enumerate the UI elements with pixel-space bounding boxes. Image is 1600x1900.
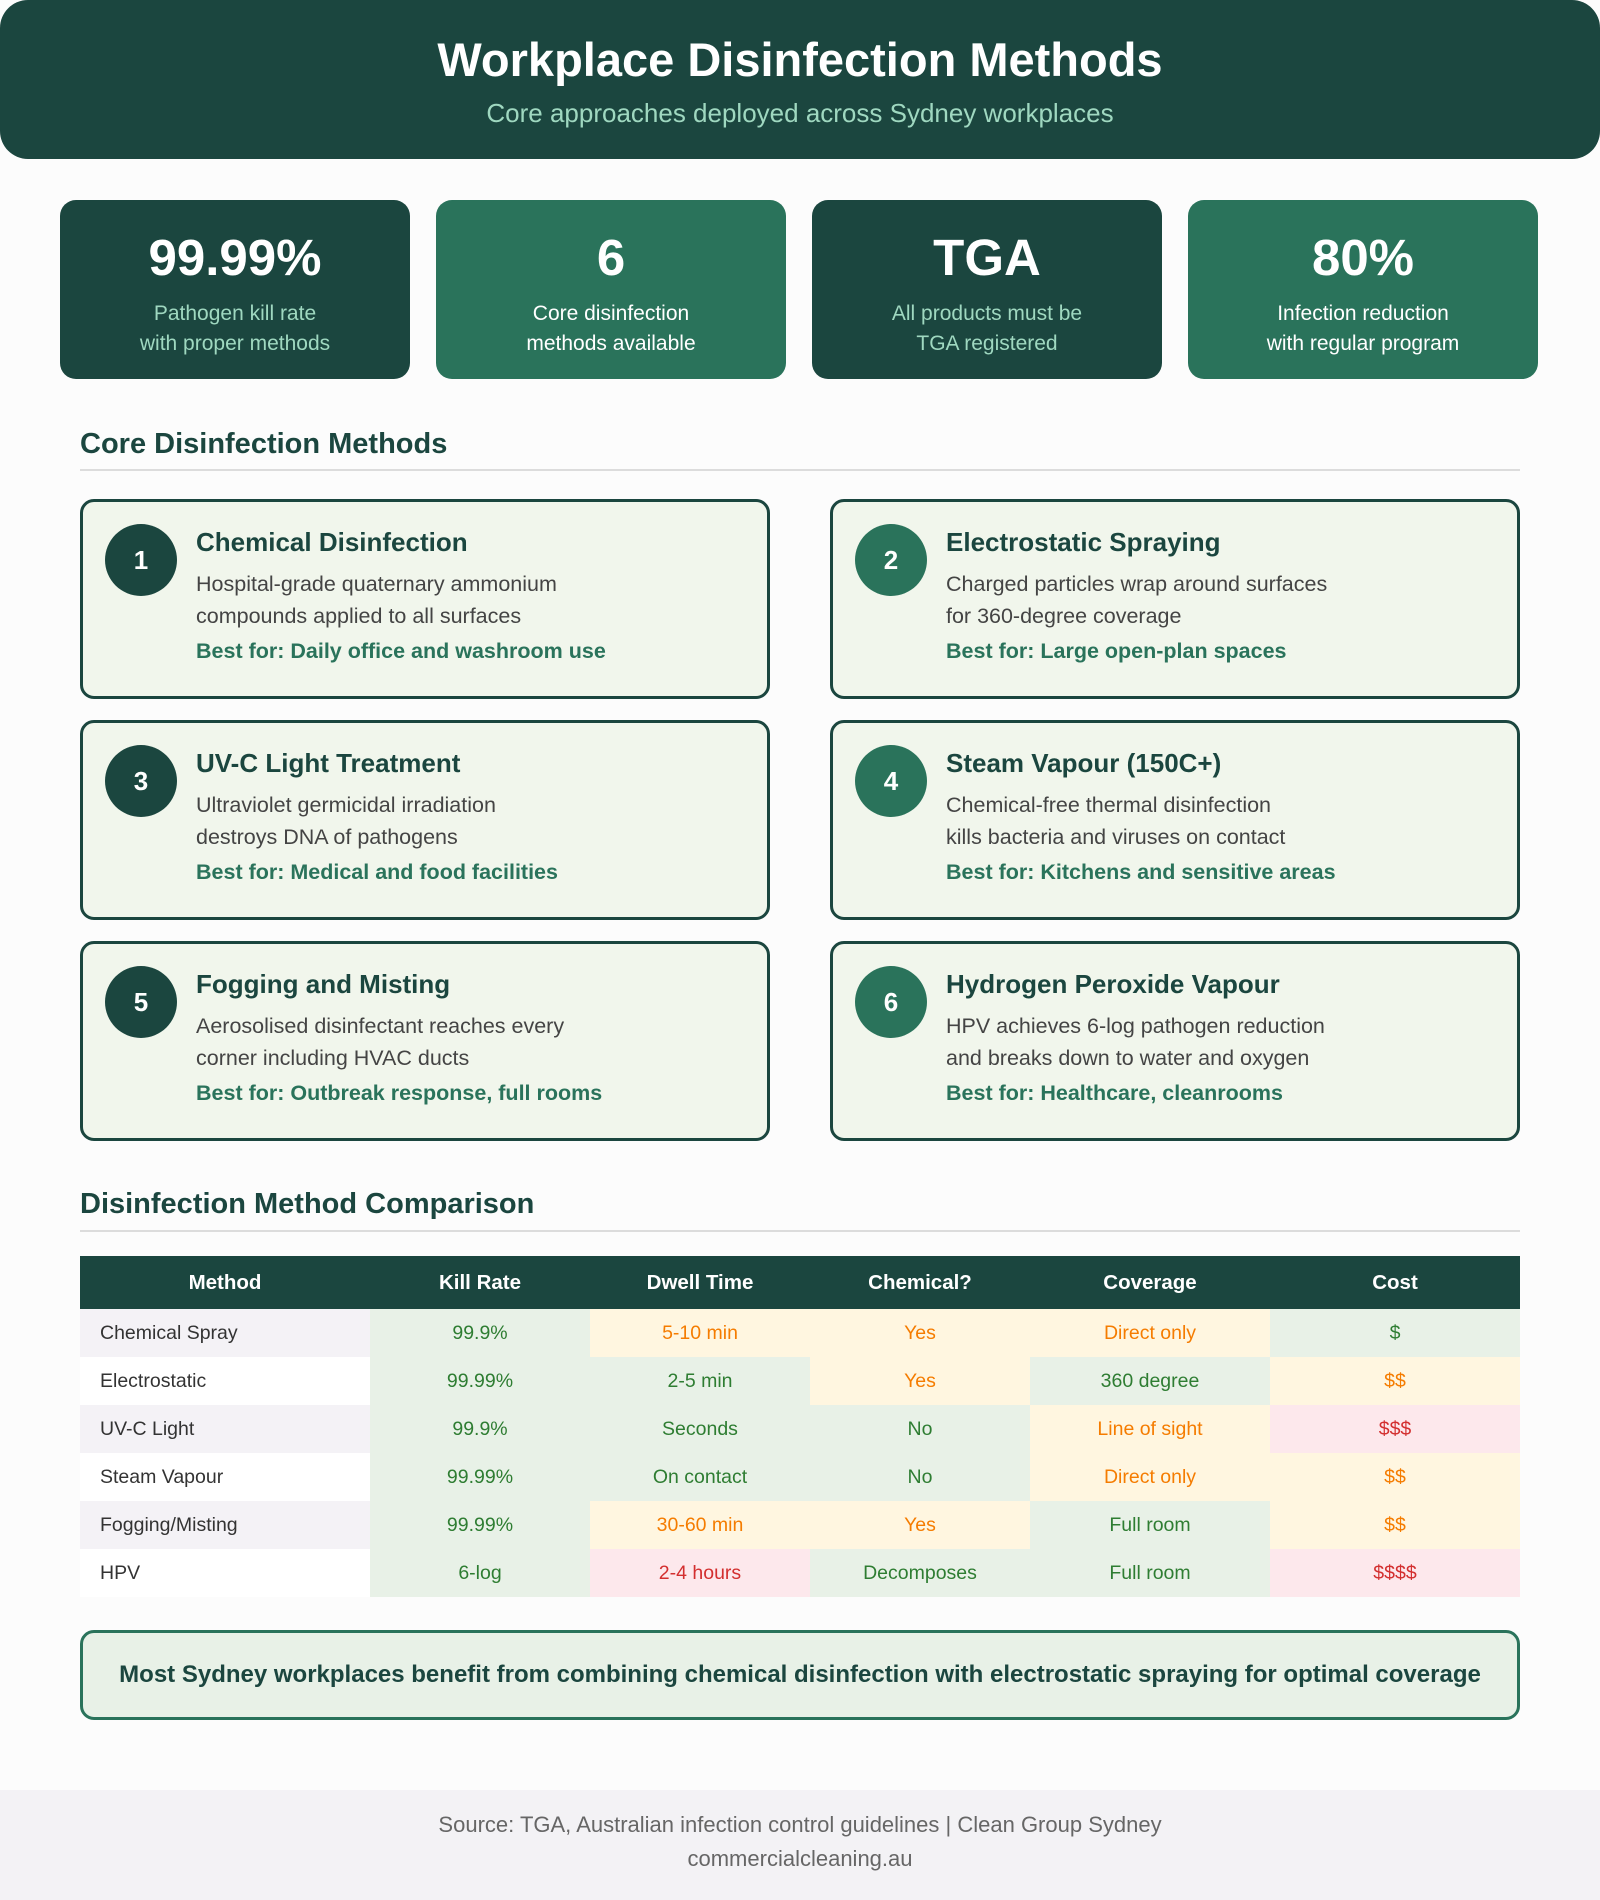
card 4 xyxy=(830,720,1520,920)
comparison table: 99.99% xyxy=(447,1370,513,1392)
card 2: Charged particles wrap around surfaces xyxy=(946,572,1327,596)
comparison table: Coverage xyxy=(1103,1270,1197,1294)
card 5 xyxy=(80,941,770,1141)
comparison table: 5-10 min xyxy=(662,1322,738,1344)
card 4: kills bacteria and viruses on contact xyxy=(946,825,1285,849)
stat: methods: Core disinfection xyxy=(533,302,689,325)
card 4: Steam Vapour (150C+) xyxy=(946,748,1221,778)
comparison table: Cost xyxy=(1372,1270,1418,1294)
comparison table: Yes xyxy=(904,1370,936,1392)
card 3: Ultraviolet germicidal irradiation xyxy=(196,793,496,817)
comparison table: Direct only xyxy=(1104,1322,1196,1344)
card 6: Best for: Healthcare, cleanrooms xyxy=(946,1081,1283,1105)
card 2: 2 xyxy=(884,545,898,575)
card 3 xyxy=(80,720,770,920)
comparison table: On contact xyxy=(653,1466,747,1488)
heading: comparison xyxy=(80,1188,1520,1232)
card 1: Chemical Disinfection xyxy=(196,527,468,557)
stat: kill rate: with proper methods xyxy=(140,332,330,355)
footer xyxy=(0,1790,1600,1900)
card 4: 4 xyxy=(884,766,898,796)
card 5: 5 xyxy=(134,987,148,1017)
comparison table: Kill Rate xyxy=(439,1270,521,1294)
card 3: 3 xyxy=(134,766,148,796)
stat: TGA: All products must be xyxy=(892,302,1082,325)
comparison table: $$$ xyxy=(1379,1418,1411,1440)
comparison table: 2-4 hours xyxy=(659,1562,741,1584)
comparison table: Chemical Spray xyxy=(100,1322,238,1344)
card 2: Best for: Large open-plan spaces xyxy=(946,639,1286,663)
comparison table: Electrostatic xyxy=(100,1370,206,1392)
comparison table: Full room xyxy=(1109,1562,1191,1584)
stat: TGA: TGA registered xyxy=(916,332,1058,355)
card 2 xyxy=(830,499,1520,699)
comparison table: No xyxy=(908,1418,932,1440)
card 2: Electrostatic Spraying xyxy=(946,527,1221,557)
comparison table: $$ xyxy=(1384,1466,1406,1488)
stat: infection reduction: 80% xyxy=(1312,229,1414,286)
card 6: and breaks down to water and oxygen xyxy=(946,1046,1309,1070)
card 5: corner including HVAC ducts xyxy=(196,1046,469,1070)
card 1: Hospital-grade quaternary ammonium xyxy=(196,572,557,596)
comparison table: 360 degree xyxy=(1101,1370,1199,1392)
stat: TGA xyxy=(812,200,1162,379)
card 3: destroys DNA of pathogens xyxy=(196,825,458,849)
stat: methods xyxy=(436,200,786,379)
comparison table: $$ xyxy=(1384,1514,1406,1536)
footer: commercialcleaning.au xyxy=(688,1846,912,1871)
comparison table: 99.9% xyxy=(452,1322,508,1344)
card 5: Best for: Outbreak response, full rooms xyxy=(196,1081,602,1105)
card 6: Hydrogen Peroxide Vapour xyxy=(946,969,1280,999)
comparison table: Yes xyxy=(904,1322,936,1344)
comparison table: No xyxy=(908,1466,932,1488)
comparison table: Method xyxy=(189,1270,261,1294)
comparison table: Chemical? xyxy=(868,1270,972,1294)
stat: methods: 6 xyxy=(597,229,625,286)
card 3: Best for: Medical and food facilities xyxy=(196,860,558,884)
comparison table: Seconds xyxy=(662,1418,738,1440)
card 4: Best for: Kitchens and sensitive areas xyxy=(946,860,1336,884)
card 5: Fogging and Misting xyxy=(196,969,450,999)
stat: infection reduction xyxy=(1188,200,1538,379)
comparison table: Fogging/Misting xyxy=(100,1514,238,1536)
stat: methods: methods available xyxy=(526,332,696,355)
card 1 xyxy=(80,499,770,699)
comparison table: 2-5 min xyxy=(667,1370,733,1392)
comparison table xyxy=(80,1256,1520,1597)
card 4: Chemical-free thermal disinfection xyxy=(946,793,1271,817)
heading: comparison: Disinfection Method Comparison xyxy=(80,1188,534,1220)
comparison table: Line of sight xyxy=(1097,1418,1203,1440)
stat: infection reduction: with regular program xyxy=(1267,332,1459,355)
comparison table: Steam Vapour xyxy=(100,1466,223,1488)
comparison table: 99.99% xyxy=(447,1514,513,1536)
header: Workplace Disinfection Methods xyxy=(437,33,1163,86)
comparison table: Dwell Time xyxy=(647,1270,753,1294)
stat: TGA: TGA xyxy=(933,229,1041,286)
comparison table: $$$$ xyxy=(1373,1562,1417,1584)
callout: Most Sydney workplaces benefit from combining chemical disinfection with electrostatic spraying for optimal coverage xyxy=(119,1661,1481,1688)
comparison table: 30-60 min xyxy=(657,1514,743,1536)
card 2: for 360-degree coverage xyxy=(946,604,1181,628)
comparison table: 99.9% xyxy=(452,1418,508,1440)
stat: kill rate: 99.99% xyxy=(148,229,321,286)
card 5: Aerosolised disinfectant reaches every xyxy=(196,1014,564,1038)
stat: infection reduction: Infection reduction xyxy=(1277,302,1449,325)
comparison table: 99.99% xyxy=(447,1466,513,1488)
card 1: 1 xyxy=(134,545,148,575)
comparison table: Yes xyxy=(904,1514,936,1536)
stat: kill rate xyxy=(60,200,410,379)
comparison table: Full room xyxy=(1109,1514,1191,1536)
comparison table: Direct only xyxy=(1104,1466,1196,1488)
heading: core methods: Core Disinfection Methods xyxy=(80,428,447,460)
comparison table: $$ xyxy=(1384,1370,1406,1392)
card 6: HPV achieves 6-log pathogen reduction xyxy=(946,1014,1325,1038)
stat: kill rate: Pathogen kill rate xyxy=(154,302,316,325)
heading: core methods xyxy=(80,428,1520,471)
card 1: compounds applied to all surfaces xyxy=(196,604,521,628)
comparison table: Decomposes xyxy=(863,1562,977,1584)
card 3: UV-C Light Treatment xyxy=(196,748,460,778)
comparison table: 6-log xyxy=(458,1562,502,1584)
card 6 xyxy=(830,941,1520,1141)
card 6: 6 xyxy=(884,987,898,1017)
comparison table: HPV xyxy=(100,1562,140,1584)
comparison table: UV-C Light xyxy=(100,1418,194,1440)
footer: Source: TGA, Australian infection control guidelines | Clean Group Sydney xyxy=(438,1812,1162,1837)
callout xyxy=(80,1630,1520,1720)
header: Core approaches deployed across Sydney workplaces xyxy=(486,98,1114,128)
card 1: Best for: Daily office and washroom use xyxy=(196,639,606,663)
comparison table: $ xyxy=(1390,1322,1400,1344)
header xyxy=(0,0,1600,159)
